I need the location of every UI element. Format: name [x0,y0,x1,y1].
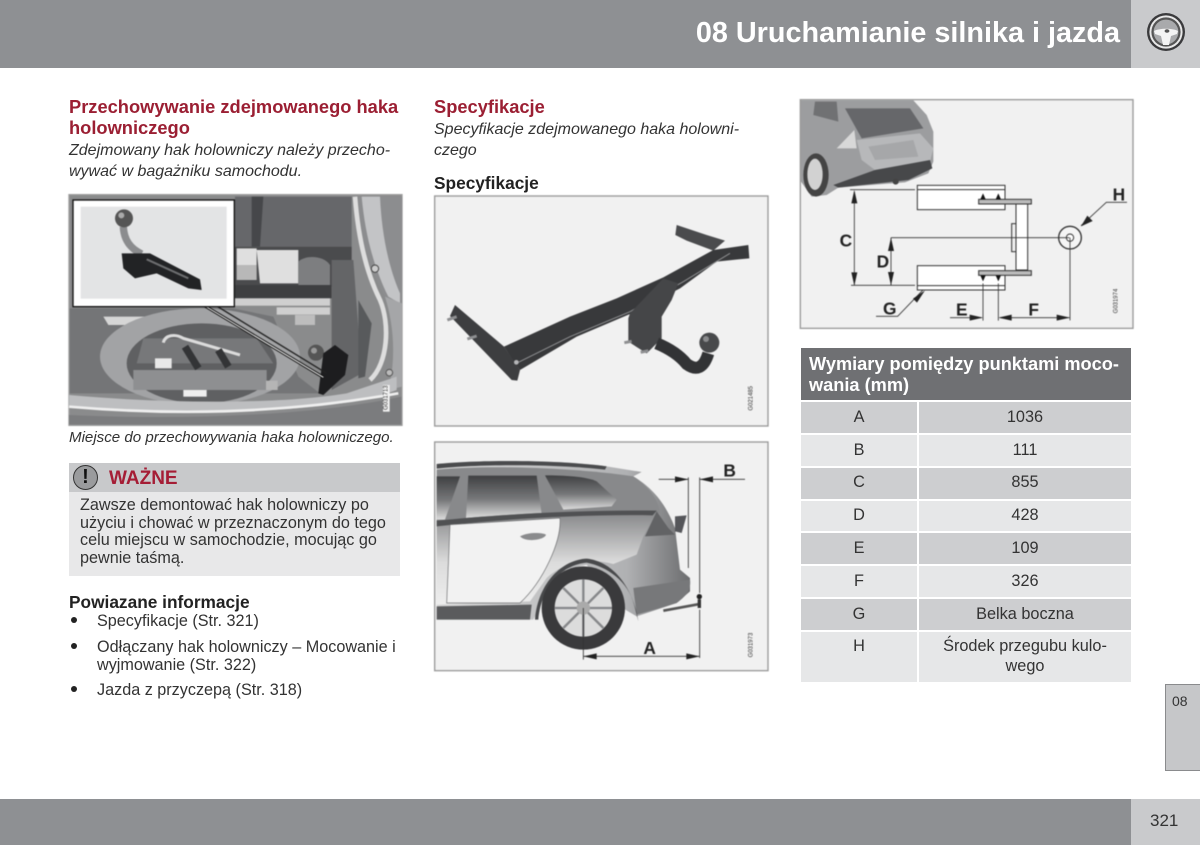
illustration: top view dimensions C to H: G031974 [1114,288,1120,313]
intro text: specifications: czego [434,142,477,159]
page number box [1131,799,1200,845]
header icon box [1131,0,1200,68]
chapter side tab: 08 [1172,693,1188,709]
related links list [71,612,396,699]
illustration: side view dimensions A B: A [643,638,656,658]
chapter side tab [1165,684,1200,771]
callout text: celu miejscu w samochodzie, mocując go [80,531,377,549]
table: dimensions: D [853,506,865,524]
callout header band [69,463,400,492]
header bar [0,0,1131,68]
table: dimensions: G [853,605,865,623]
table: dimensions: 428 [1011,506,1039,524]
illustration: side view dimensions A B: G031973 [749,632,755,657]
related links list: wyjmowanie (Str. 322) [97,656,256,674]
intro text: specifications: Specyfikacje zdejmowanego haka holowni- [434,121,739,138]
table: dimensions: A [854,408,864,426]
illustration: top view dimensions C to H: E [956,299,968,319]
icon: warning exclamation [73,465,98,490]
heading: storage [69,96,398,138]
illustration: top view dimensions C to H: G [883,298,896,318]
photo: trunk with stowed towbar: G031713 [384,385,390,410]
callout text [80,496,386,567]
related links list: Specyfikacje (Str. 321) [97,612,259,630]
subheading: specifications: Specyfikacje [434,173,539,193]
table header: wania (mm) [809,375,909,395]
intro text: storage [68,142,390,180]
heading: specifications: Specyfikacje [434,96,545,117]
table: dimensions: 1036 [1007,408,1043,426]
table: dimensions: 111 [1013,441,1037,459]
intro text: storage: wywać w bagażniku samochodu. [69,163,302,180]
table: dimensions: 855 [1011,473,1039,491]
callout text: Zawsze demontować hak holowniczy po [80,496,369,514]
table: dimensions: H [853,637,865,655]
table: dimensions: Środek przegubu kulo- [943,637,1107,655]
heading: storage: Przechowywanie zdejmowanego haka [69,96,398,117]
table: dimensions: 326 [1011,572,1039,590]
illustration: top view dimensions C to H: D [877,252,889,272]
table: dimensions: F [854,572,864,590]
illustration: top view dimensions C to H: C [840,231,853,251]
page number box: 321 [1150,811,1178,830]
table: dimensions: wego [1006,657,1044,675]
callout text: pewnie taśmą. [80,549,184,567]
table header: Wymiary pomiędzy punktami moco- [809,354,1119,374]
illustration: towbar: G021485 [749,385,755,411]
callout heading: WAŻNE [109,468,178,489]
intro text: specifications [434,121,739,159]
table: dimensions: E [854,539,864,557]
icon: steering wheel [1147,13,1185,51]
illustration: top view dimensions C to H: H [1113,184,1125,204]
heading: related info: Powiazane informacje [69,592,250,612]
table: dimensions: C [853,473,865,491]
table: dimensions [801,348,1131,682]
chapter title: 08 Uruchamianie silnika i jazda [696,17,1120,49]
photo caption: Miejsce do przechowywania haka holowniczego. [69,429,394,446]
footer bar [0,799,1131,845]
table header [801,348,1131,400]
related links list: Jazda z przyczepą (Str. 318) [97,681,302,699]
table: dimensions: B [854,441,864,459]
intro text: storage: Zdejmowany hak holowniczy należy przecho- [69,142,390,159]
callout: important [69,463,400,576]
related links list: Odłączany hak holowniczy – Mocowanie i [97,638,396,656]
illustration: top view dimensions C to H: F [1028,299,1039,319]
illustration: side view dimensions A B: B [723,460,736,480]
icon: warning exclamation: ! [82,466,89,488]
table: dimensions: 109 [1011,539,1039,557]
heading: storage: holowniczego [69,117,190,138]
table: dimensions: Belka boczna [976,605,1074,623]
callout text: użyciu i chować w przeznaczonym do tego [80,514,386,532]
